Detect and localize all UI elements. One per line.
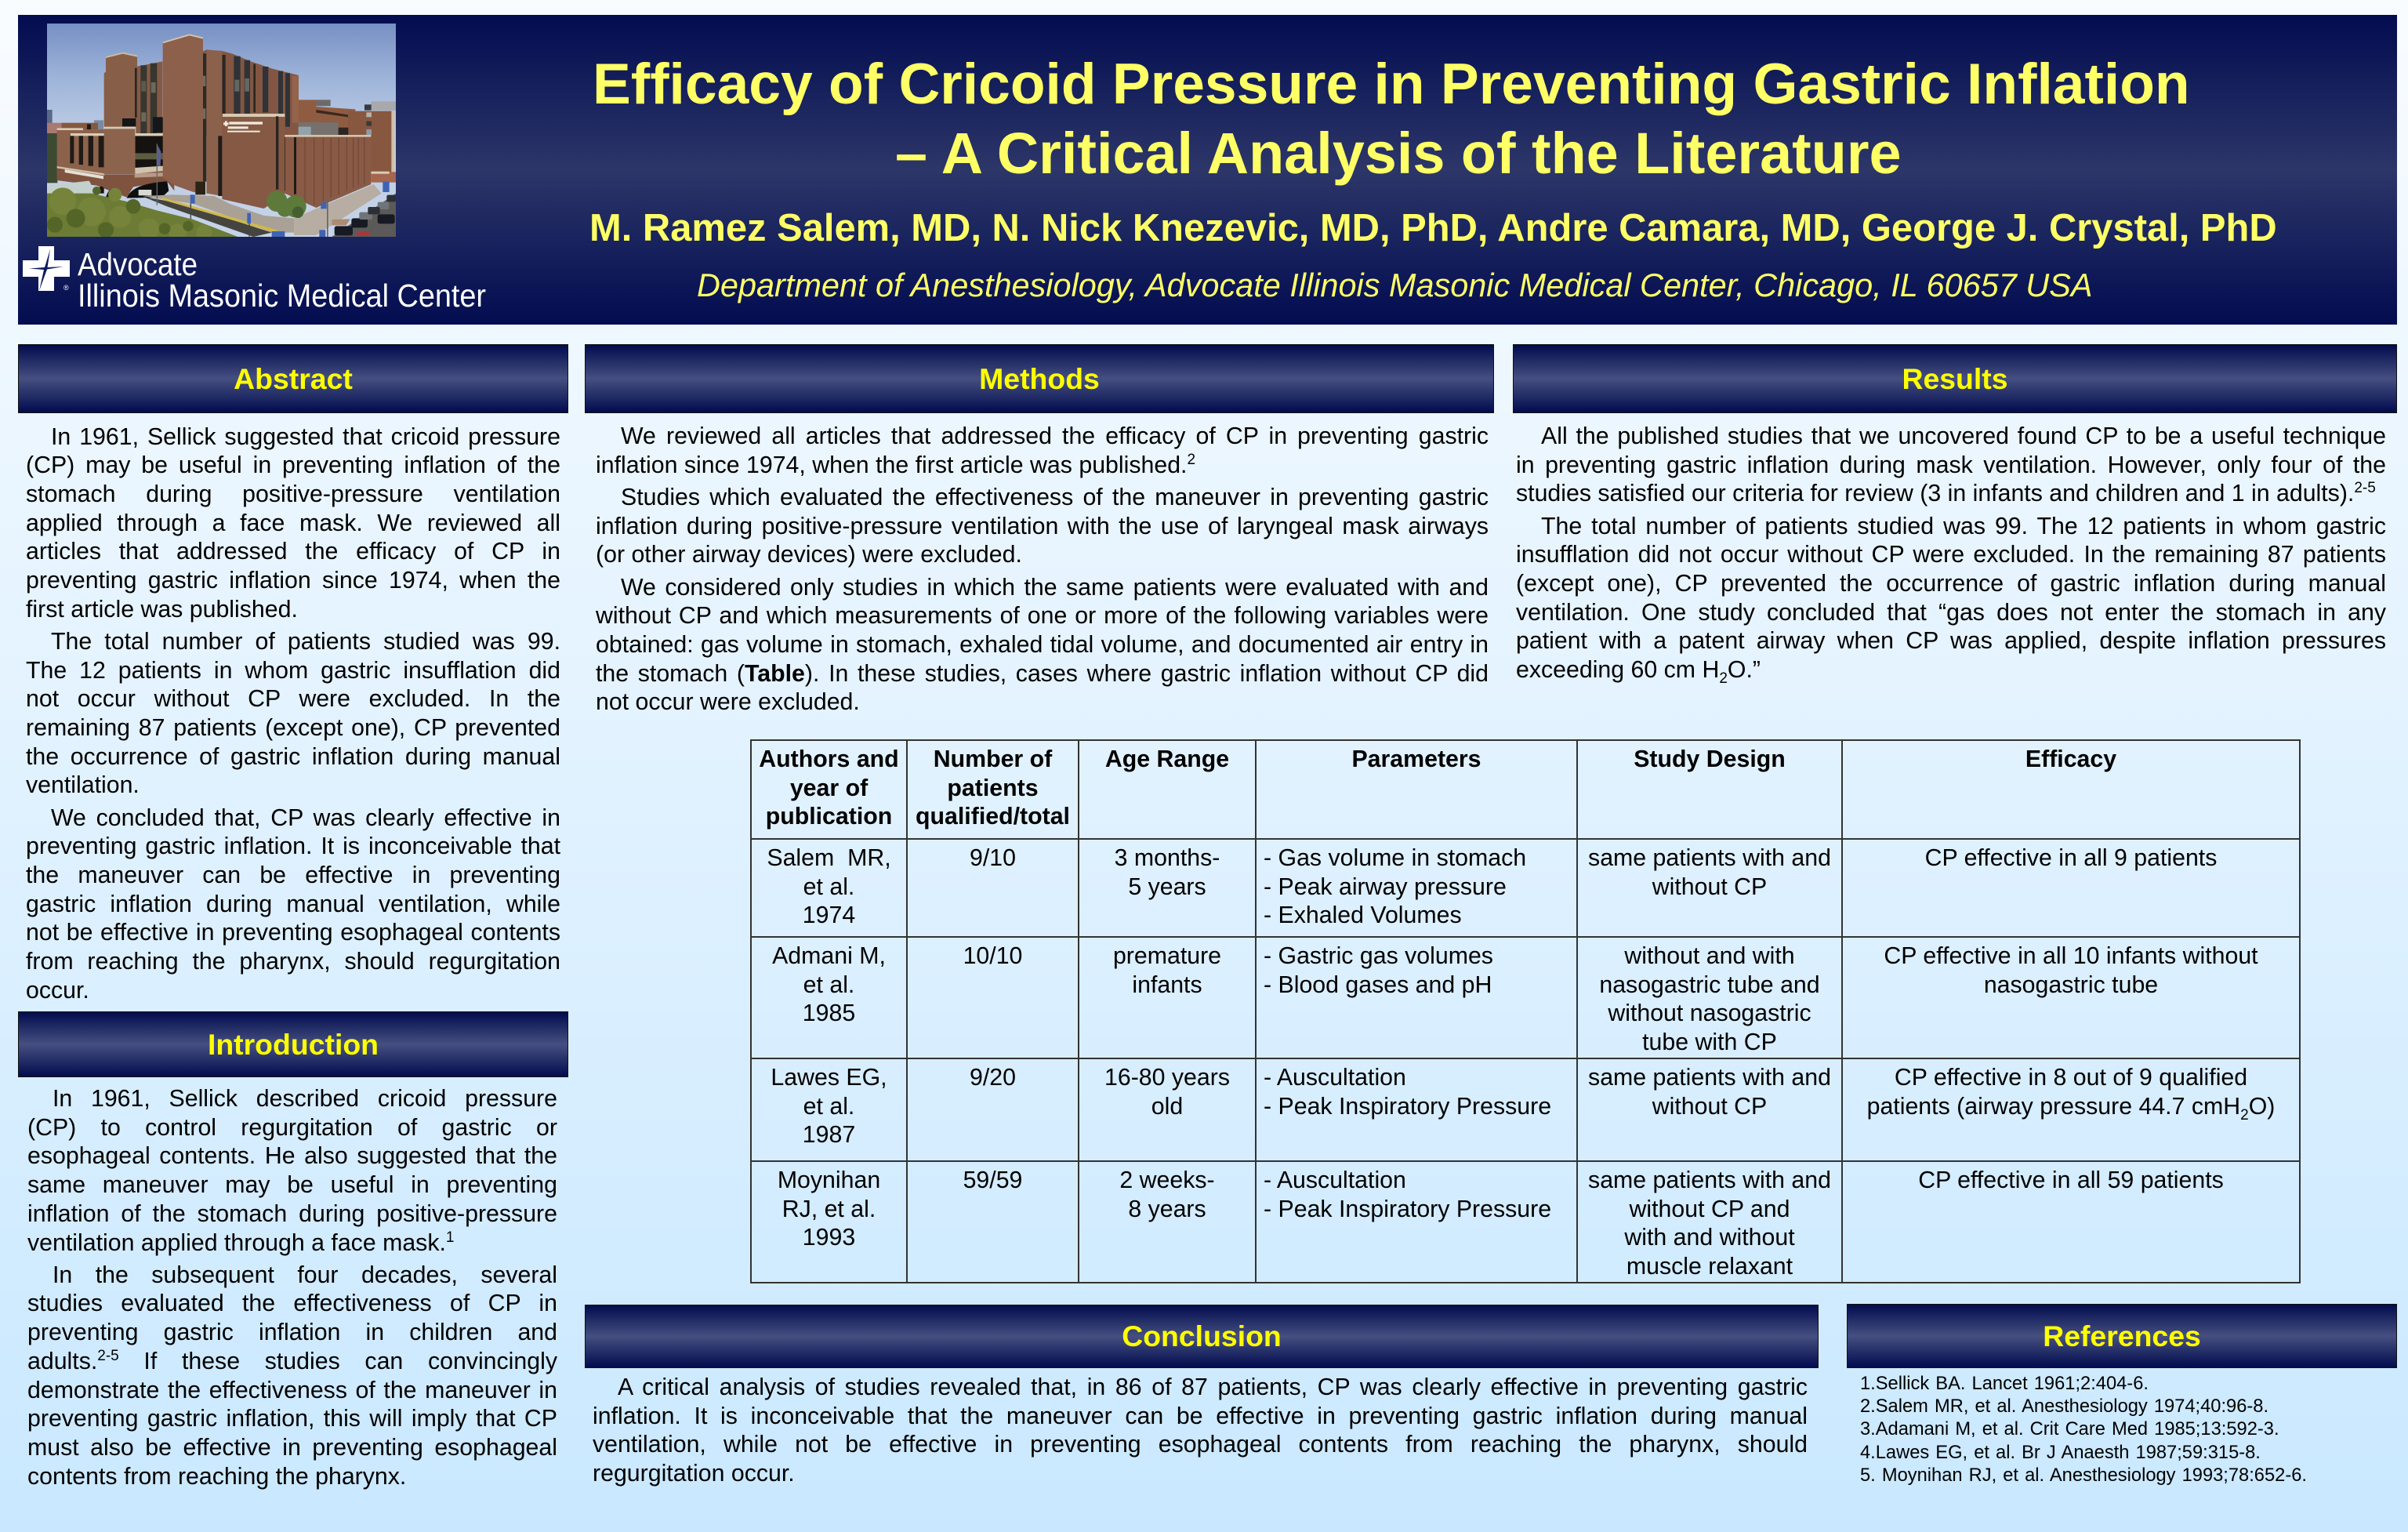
abstract text: from reaching the pharynx, should regurgitation <box>26 949 560 975</box>
table: studies reviewed: nasogastric tube and <box>1599 972 1820 998</box>
title line 2: – A Critical Analysis of the Literature <box>895 121 1902 186</box>
ground <box>143 194 294 233</box>
introduction text: demonstrate the effectiveness of the maneuver in <box>27 1378 557 1403</box>
abstract text: ventilation. <box>26 772 140 798</box>
table: studies reviewed: - Peak airway pressure <box>1264 874 1507 900</box>
photo: hospital building <box>47 24 396 237</box>
lobby glass <box>135 136 175 168</box>
poles and banners <box>157 143 158 205</box>
abstract text <box>26 423 560 1004</box>
table: studies reviewed: et al. <box>803 1094 854 1120</box>
abstract text: the occurrence of gastric inflation during manual <box>26 744 560 770</box>
far background <box>47 110 53 125</box>
table: studies reviewed: 1993 <box>803 1225 855 1251</box>
main tall section <box>201 49 299 136</box>
table: studies reviewed: - Gastric gas volumes <box>1264 943 1493 969</box>
conclusion text: inflation. It is inconceivable that the maneuver can be effective in preventing gastric inflation during manual <box>593 1403 1808 1429</box>
methods text: Studies which evaluated the effectiveness of the maneuver in preventing gastric <box>621 485 1489 510</box>
introduction text: must also be effective in preventing esophageal <box>27 1435 557 1461</box>
abstract text: first article was published. <box>26 597 298 623</box>
introduction text: preventing gastric inflation in children and <box>27 1320 557 1345</box>
table: studies reviewed: qualified/total <box>916 804 1070 830</box>
heading: references: References <box>2043 1320 2201 1352</box>
table: studies reviewed: Admani M, <box>772 943 886 969</box>
table: studies reviewed: - Exhaled Volumes <box>1264 902 1462 928</box>
heading: methods: Methods <box>979 362 1100 395</box>
results text: studies satisfied our criteria for review (3 in infants and children and 1 in adults).2-5 <box>1516 480 2376 506</box>
methods text: the stomach (Table). In these studies, cases where gastric inflation without CP did <box>596 661 1489 687</box>
heading: conclusion <box>585 1305 1819 1368</box>
methods text: We considered only studies in which the same patients were evaluated with and <box>621 575 1489 601</box>
table: studies reviewed: old <box>1151 1094 1183 1120</box>
icon: white cross <box>23 246 70 291</box>
heading: results <box>1513 344 2397 413</box>
table: studies reviewed: Study Design <box>1634 746 1786 772</box>
table: studies reviewed: 16-80 years <box>1104 1065 1230 1091</box>
tower 1 <box>104 53 137 127</box>
table: studies reviewed: without nasogastric <box>1608 1000 1811 1026</box>
methods text: not occur were excluded. <box>596 689 860 715</box>
logo text: ® <box>63 284 69 292</box>
panel: conclusion <box>585 1305 1819 1487</box>
table: studies reviewed: 2 weeks- <box>1119 1167 1215 1193</box>
table: studies reviewed: CP effective in 8 out of 9 qualified <box>1895 1065 2247 1091</box>
table: studies reviewed: muscle relaxant <box>1626 1254 1793 1280</box>
heading: references <box>1847 1304 2397 1368</box>
table: studies reviewed: infants <box>1132 972 1202 998</box>
results text <box>1516 423 2386 687</box>
trees <box>47 194 238 237</box>
introduction text: same maneuver may be useful in preventing <box>27 1172 557 1198</box>
table: studies reviewed: with and without <box>1624 1225 1795 1251</box>
methods text: without CP and which measurements of one or more of the following variables were <box>596 603 1489 629</box>
base band <box>57 166 174 198</box>
abstract text: (CP) may be useful in preventing inflation of the <box>26 452 560 478</box>
table: studies reviewed: Moynihan <box>778 1167 880 1193</box>
table: studies reviewed: 59/59 <box>963 1167 1022 1193</box>
right wing <box>281 136 371 208</box>
table: studies reviewed: nasogastric tube <box>1984 972 2158 998</box>
logo: Advocate Illinois Masonic Medical Center <box>23 246 486 314</box>
table: studies reviewed: CP effective in all 59 patients <box>1918 1167 2224 1193</box>
introduction text: contents from reaching the pharynx. <box>27 1464 406 1490</box>
table: studies reviewed: 8 years <box>1128 1196 1206 1222</box>
abstract text: The 12 patients in whom gastric insufflation did <box>26 658 560 684</box>
table: studies reviewed: year of <box>790 775 868 801</box>
heading: introduction <box>18 1011 568 1077</box>
reference list: 4.Lawes EG, et al. Br J Anaesth 1987;59:315-8. <box>1860 1443 2261 1463</box>
methods text: We reviewed all articles that addressed the efficacy of CP in preventing gastric <box>621 423 1489 449</box>
heading: abstract: Abstract <box>234 362 353 395</box>
introduction text: preventing gastric inflation, this will imply that CP <box>27 1406 557 1432</box>
abstract text: applied through a face mask. We reviewed all <box>26 510 560 536</box>
table: studies reviewed: - Blood gases and pH <box>1264 972 1492 998</box>
table: studies reviewed: CP effective in all 9 patients <box>1925 845 2217 871</box>
conclusion text <box>593 1374 1808 1487</box>
table: studies reviewed: - Auscultation <box>1264 1167 1406 1193</box>
heading: abstract <box>18 344 568 413</box>
methods text <box>596 423 1489 715</box>
table: studies reviewed: same patients with and <box>1588 1065 1831 1091</box>
abstract text: preventing gastric inflation since 1974, when the <box>26 568 560 594</box>
abstract text: We concluded that, CP was clearly effective in <box>51 805 560 831</box>
results text: All the published studies that we uncovered found CP to be a useful technique <box>1541 423 2386 449</box>
results text: exceeding 60 cm H2O.” <box>1516 657 1761 687</box>
introduction text: In 1961, Sellick described cricoid pressure <box>53 1086 557 1112</box>
table: studies reviewed: Efficacy <box>2025 746 2116 772</box>
methods text: inflation during positive-pressure ventilation with the use of laryngeal mask airways <box>596 514 1489 539</box>
table: studies reviewed: et al. <box>803 874 854 900</box>
introduction text <box>27 1086 557 1490</box>
logo text <box>63 246 486 314</box>
methods text: inflation since 1974, when the first article was published.2 <box>596 452 1195 478</box>
entrance arch <box>127 181 169 198</box>
panel: results <box>1513 344 2397 687</box>
table: studies reviewed: patients <box>947 775 1039 801</box>
table: studies reviewed: Parameters <box>1351 746 1481 772</box>
heading: results: Results <box>1902 362 2008 395</box>
table: studies reviewed: publication <box>766 804 892 830</box>
table: studies reviewed: 5 years <box>1128 874 1206 900</box>
introduction text: In the subsequent four decades, several <box>53 1262 557 1288</box>
table: studies reviewed: 1987 <box>803 1122 855 1148</box>
reference list: 5. Moynihan RJ, et al. Anesthesiology 1993;78:652-6. <box>1860 1465 2307 1486</box>
department: Department of Anesthesiology, Advocate Illinois Masonic Medical Center, Chicago, IL 60657 USA <box>697 267 2092 303</box>
results text: patient with a patent airway when CP was applied, despite inflation pressures <box>1516 628 2386 654</box>
table: studies reviewed: premature <box>1113 943 1221 969</box>
table: studies reviewed: 9/20 <box>970 1065 1016 1091</box>
methods text: obtained: gas volume in stomach, exhaled tidal volume, and documented air entry in <box>596 632 1489 658</box>
reference list: 2.Salem MR, et al. Anesthesiology 1974;40:96-8. <box>1860 1396 2268 1417</box>
introduction text: studies evaluated the effectiveness of CP in <box>27 1291 557 1316</box>
methods text: (or other airway devices) were excluded. <box>596 542 1022 568</box>
conclusion text: ventilation, while not be effective in preventing esophageal contents from reaching the pharynx, should <box>593 1432 1808 1458</box>
abstract text: stomach during positive-pressure ventilation <box>26 481 560 507</box>
front low tower <box>104 127 135 174</box>
heading: introduction: Introduction <box>208 1028 379 1061</box>
table: studies reviewed: 10/10 <box>963 943 1022 969</box>
conclusion text: A critical analysis of studies revealed that, in 86 of 87 patients, CP was clearly effective in preventing gastric <box>618 1374 1808 1400</box>
panel: introduction <box>18 1011 568 1490</box>
table: studies reviewed <box>750 739 2301 1283</box>
panel: abstract <box>18 344 568 1004</box>
results text: insufflation did not occur without CP were excluded. In the remaining 87 patients <box>1516 542 2386 568</box>
results text: The total number of patients studied was 99. The 12 patients in whom gastric <box>1541 514 2386 539</box>
table: studies reviewed: 1985 <box>803 1000 855 1026</box>
table: studies reviewed: CP effective in all 10 infants without <box>1884 943 2258 969</box>
sign block <box>222 115 285 209</box>
table: studies reviewed: - Peak Inspiratory Pressure <box>1264 1094 1551 1120</box>
table: studies reviewed: patients (airway pressure 44.7 cmH2O) <box>1867 1094 2275 1124</box>
table: studies reviewed: Salem MR, <box>767 845 891 871</box>
table: studies reviewed: without CP and <box>1630 1196 1790 1222</box>
heading: conclusion: Conclusion <box>1122 1320 1282 1352</box>
introduction text: inflation of the stomach during positive-pressure <box>27 1201 557 1227</box>
table: studies reviewed: 3 months- <box>1115 845 1220 871</box>
title line 1: Efficacy of Cricoid Pressure in Preventing Gastric Inflation <box>593 52 2190 116</box>
abstract text: preventing gastric inflation. It is inconceivable that <box>26 833 560 859</box>
conclusion text: regurgitation occur. <box>593 1461 795 1487</box>
left low wing <box>61 123 98 134</box>
table: studies reviewed: - Gas volume in stomach <box>1264 845 1526 871</box>
results text: in preventing gastric inflation during mask ventilation. However, only four of the <box>1516 452 2386 478</box>
table: studies reviewed: Number of <box>934 746 1052 772</box>
abstract text: gastric inflation during manual ventilation, while <box>26 891 560 917</box>
heading: methods <box>585 344 1494 413</box>
greenhouse <box>47 181 92 198</box>
abstract text: articles that addressed the efficacy of CP in <box>26 539 560 565</box>
results text: ventilation. One study concluded that “gas does not enter the stomach in any <box>1516 600 2386 626</box>
abstract text: occur. <box>26 978 89 1004</box>
introduction text: adults.2-5 If these studies can convincingly <box>27 1348 557 1374</box>
table: studies reviewed: Authors and <box>759 746 899 772</box>
abstract text: The total number of patients studied was 99. <box>51 629 560 655</box>
panel: references <box>1847 1304 2397 1486</box>
reference list: 3.Adamani M, et al. Crit Care Med 1985;13:592-3. <box>1860 1419 2279 1439</box>
logo text: Advocate <box>78 246 198 282</box>
introduction text: ventilation applied through a face mask.1 <box>27 1229 454 1256</box>
table: studies reviewed: tube with CP <box>1642 1029 1777 1055</box>
window section <box>136 61 162 133</box>
table: studies reviewed: without and with <box>1624 943 1795 969</box>
table: studies reviewed: same patients with and <box>1588 1167 1831 1193</box>
introduction text: (CP) to control regurgitation of gastric or <box>27 1115 557 1141</box>
results text: (except one), CP prevented the occurrence of gastric inflation during manual <box>1516 571 2386 597</box>
cars <box>335 214 395 235</box>
reference list <box>1860 1374 2307 1486</box>
abstract text: remaining 87 patients (except one), CP prevented <box>26 715 560 741</box>
table: studies reviewed: without CP <box>1652 1094 1767 1120</box>
authors: M. Ramez Salem, MD, N. Nick Knezevic, MD, PhD, Andre Camara, MD, George J. Crystal, PhD <box>589 207 2277 249</box>
panel: methods <box>585 344 1494 715</box>
table: studies reviewed: et al. <box>803 972 854 998</box>
title <box>589 52 2277 303</box>
table: studies reviewed: Lawes EG, <box>771 1065 887 1091</box>
abstract text: not occur without CP were excluded. In the <box>26 686 560 712</box>
header banner <box>18 15 2397 325</box>
table: studies reviewed: 9/10 <box>970 845 1016 871</box>
tower 2 <box>163 34 203 194</box>
abstract text: not be effective in preventing esophageal contents <box>26 920 560 946</box>
table: studies reviewed: Age Range <box>1105 746 1229 772</box>
abstract text: the maneuver can be effective in preventing <box>26 862 560 888</box>
table: studies reviewed: RJ, et al. <box>782 1196 876 1222</box>
introduction text: esophageal contents. He also suggested that the <box>27 1143 557 1169</box>
table: studies reviewed: - Auscultation <box>1264 1065 1406 1091</box>
table: studies reviewed: same patients with and <box>1588 845 1831 871</box>
table: studies reviewed: - Peak Inspiratory Pressure <box>1264 1196 1551 1222</box>
reference list: 1.Sellick BA. Lancet 1961;2:404-6. <box>1860 1374 2149 1394</box>
table: studies reviewed: without CP <box>1652 874 1767 900</box>
abstract text: In 1961, Sellick suggested that cricoid pressure <box>51 423 560 450</box>
table: studies reviewed: 1974 <box>803 902 855 928</box>
